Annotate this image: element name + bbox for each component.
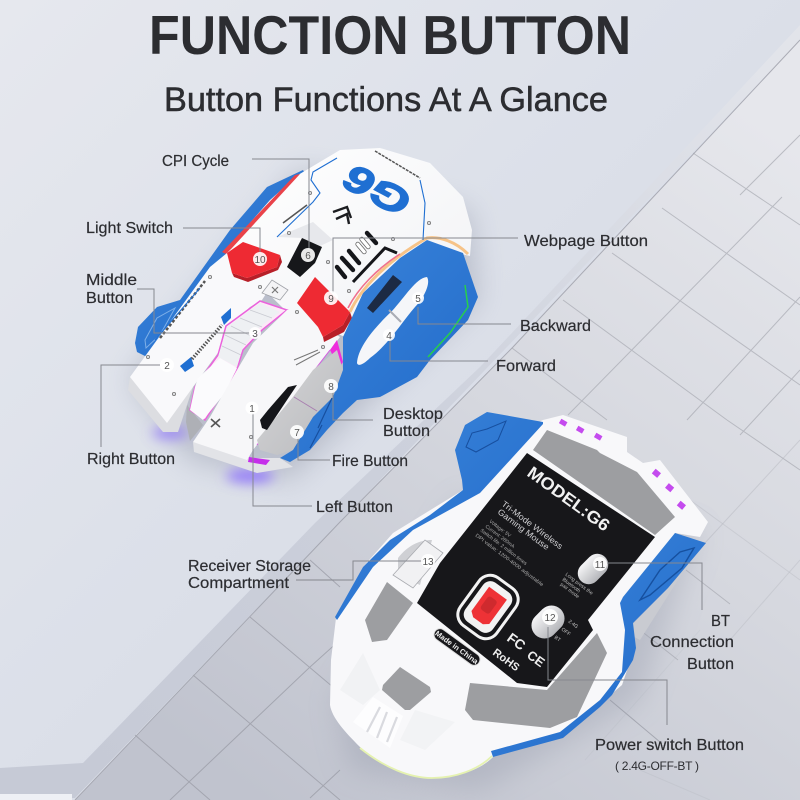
cert marks: FC [504, 629, 529, 653]
callout labels: Desktop [383, 406, 443, 423]
callout labels: Forward [496, 358, 556, 375]
white front key [190, 358, 237, 420]
mouse: bottom view [330, 412, 708, 790]
callout labels [86, 153, 744, 773]
grey side buttons 7 and 8 [257, 350, 343, 455]
callout labels: Middle [86, 272, 137, 289]
X label icon [262, 280, 288, 300]
scroll wheel [218, 303, 280, 367]
cert marks: RoHS [490, 647, 522, 674]
callout labels: Webpage Button [524, 233, 648, 250]
label spec text: Switch life: 2 million times [479, 528, 528, 567]
rainbow rim [350, 238, 468, 312]
black CPI key 6 [287, 238, 322, 277]
right button underside [128, 377, 193, 432]
rear recess left [340, 653, 380, 705]
black label [417, 453, 655, 687]
switch position text: BT [553, 635, 562, 643]
rear blue decal lines [277, 158, 337, 237]
drop shadow [130, 170, 478, 480]
slide switch 11 [573, 549, 613, 589]
rainbow front glow [360, 748, 492, 778]
etch on blue [310, 398, 332, 448]
blue right side [491, 533, 706, 757]
spine shading [277, 222, 333, 246]
number badges [160, 248, 607, 625]
callout labels: CPI Cycle [162, 153, 229, 170]
switch position text: OFF [560, 627, 571, 637]
vent slots [337, 233, 376, 277]
white shell [330, 415, 708, 778]
number badges: 4 [386, 331, 392, 342]
callout labels: Left Button [316, 499, 393, 516]
sensor window [450, 568, 526, 646]
callout labels: Backward [520, 318, 591, 335]
storage cover [393, 540, 443, 588]
screws [146, 191, 431, 439]
number badges: 11 [595, 560, 606, 571]
side decal [160, 281, 205, 338]
red DPI key 10 [227, 242, 280, 278]
wheel ribs [222, 310, 272, 355]
front X icon [211, 419, 220, 427]
subtitle: Button Functions At A Glance [164, 81, 608, 119]
number badges: 7 [294, 428, 300, 439]
number badges: 12 [544, 613, 556, 624]
number badges: 6 [305, 251, 311, 262]
label spec text: Current: 280mA [484, 524, 516, 550]
model text: MODEL:G6 [524, 463, 613, 535]
red accent edge [222, 174, 300, 254]
large grey pad [465, 633, 607, 728]
number badges: 9 [328, 294, 334, 305]
right blue side [280, 240, 478, 462]
vents magenta [559, 419, 686, 510]
red key 9 underside [323, 312, 352, 342]
red DPI key 9 [297, 277, 350, 337]
black grip badge [367, 275, 402, 313]
chevrons [333, 207, 351, 224]
number badges: 8 [328, 382, 334, 393]
rear decal line [375, 151, 420, 178]
number badges: 5 [415, 294, 421, 305]
number badges: 13 [422, 557, 434, 568]
made in china pill: Made in China [433, 629, 481, 666]
side button slot oval [357, 277, 428, 365]
left grey pad [365, 582, 413, 642]
label spec text: Voltage: 5V [488, 519, 512, 539]
under-glow [152, 427, 274, 483]
magenta edge [330, 340, 343, 368]
mouse: top view [128, 148, 478, 483]
callout labels: Compartment [188, 575, 290, 592]
number badges: 3 [252, 329, 258, 340]
green light strip [428, 285, 468, 357]
label spec text [474, 499, 565, 588]
cert marks [490, 629, 548, 674]
callout labels: BT [711, 613, 730, 630]
side etch [640, 548, 694, 600]
vent pills [355, 236, 371, 255]
front gap [186, 405, 203, 441]
long press text: Long press the [564, 572, 594, 597]
number badges: 10 [254, 255, 266, 266]
switch position text [553, 619, 579, 643]
callout labels: Button [687, 656, 734, 673]
small grey pad [382, 667, 431, 710]
top grey pad [533, 430, 675, 535]
callout labels: Fire Button [332, 453, 408, 470]
rear recess right [400, 710, 455, 750]
left blue strip [135, 170, 306, 357]
number badges: 2 [164, 361, 170, 372]
number badges: 1 [249, 404, 255, 415]
long press text: Bluetooth [561, 577, 581, 594]
callout labels: Power switch Button [595, 737, 744, 754]
drop shadow [335, 500, 700, 790]
slide switch 12 [526, 600, 570, 644]
leader lines [101, 159, 702, 725]
label spec text: Tri-Mode Wireless [500, 499, 565, 551]
small print [294, 350, 320, 365]
callout labels: ( 2.4G-OFF-BT ) [615, 759, 699, 773]
wing decal [466, 421, 506, 452]
label spec text: DPI value: 1200-4000 adjustable [474, 533, 545, 588]
callout labels: Light Switch [86, 220, 173, 237]
black slot [260, 385, 297, 430]
rear decal G6: G6 [337, 155, 418, 224]
callout labels: Right Button [87, 451, 175, 468]
red key undersides [232, 255, 282, 282]
cert marks: CE [524, 647, 548, 670]
callout labels: Button [383, 423, 430, 440]
wheel pink housing [190, 301, 287, 420]
label spec text: Gaming Mouse [496, 507, 552, 552]
callout labels: Button [86, 290, 133, 307]
thumb wing decal [145, 308, 175, 348]
long press text: pair mode [559, 582, 580, 600]
side button divider [389, 310, 401, 322]
right button panel [130, 253, 283, 423]
left button underside [193, 442, 293, 473]
left blue strip and wing [335, 412, 543, 620]
left button panel [193, 310, 340, 460]
title: FUNCTION BUTTON [149, 4, 631, 66]
X tags [180, 308, 231, 372]
callout labels: Receiver Storage [188, 558, 311, 575]
callout labels: Connection [650, 634, 734, 651]
rear white shell [227, 148, 472, 337]
switch position text: 2.4G [567, 619, 579, 630]
rear foot ribs [353, 697, 403, 748]
storage recess [398, 540, 432, 585]
side stripe [155, 288, 200, 340]
grey underside behind side [625, 545, 700, 640]
black L stroke [353, 248, 397, 282]
